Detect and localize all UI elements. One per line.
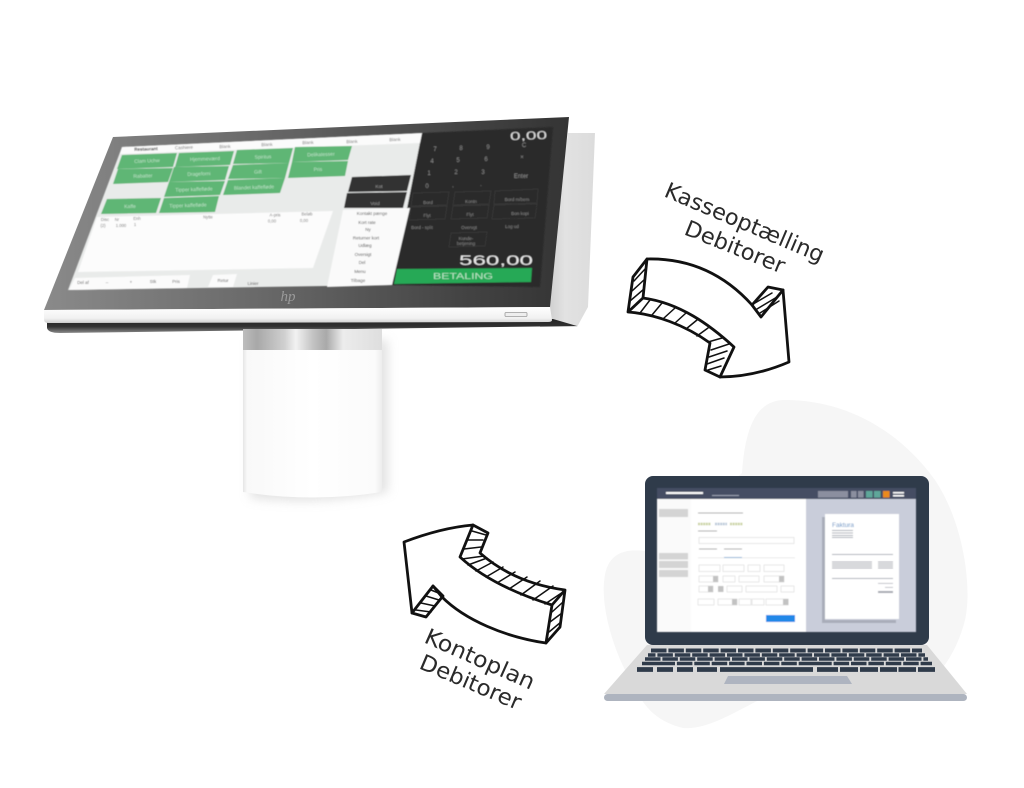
app header [657,488,916,499]
laptop lid [645,476,929,645]
invoice lines [832,530,893,593]
trackpad [724,676,852,684]
invoice title: Faktura [832,522,854,529]
laptop screen [657,488,916,632]
function keys: Bon kopi [511,211,529,216]
display bezel [44,117,569,310]
keypad: 5 [456,158,460,164]
total amount: 560,00 [459,252,533,268]
tile labels: Spiritus [255,154,272,161]
keypad: 4 [430,159,434,165]
tabs: Cashiere [175,145,194,150]
tile labels: Clam Uchw [134,158,160,165]
order table text: 0,00 [268,218,277,224]
keypad: 6 [484,157,488,163]
Debitorer: Debitorer [416,651,526,716]
side menu items: Oversigt [355,252,372,257]
arrow extrusion edges [628,259,783,377]
background blob behind laptop [604,400,967,728]
invoice page [825,514,899,619]
Kot and Void labels [370,184,383,207]
header items [666,491,904,498]
sidebar [657,499,691,632]
Kot and Void labels: Void [370,201,380,207]
toolbar text: Del af [77,280,90,285]
toolbar text: Retur [217,278,229,283]
Kot button [348,175,411,192]
order table text: (2) [100,223,106,228]
right dark panel [392,127,553,287]
side menu [327,208,410,287]
form inputs [698,565,794,605]
arrow: POS to laptop [628,259,789,377]
keypad: 3 [481,170,485,176]
invoice shadow [822,517,896,623]
keyboard deck [604,645,967,694]
keyboard [637,650,935,670]
function keys: Bord [423,200,433,205]
laptop base [604,694,967,701]
sidebar items [659,509,688,577]
tabs: Restaurant [134,146,158,152]
side menu items: Returner kort [353,236,380,240]
tabs: Blank [219,144,231,149]
toolbar text: + [130,280,133,284]
toolbar text: Linier [247,281,259,286]
tile labels: Gift [254,169,263,176]
side menu items: Tilbage [351,278,366,283]
back mounting plate [540,133,595,327]
order table [78,211,333,272]
tile labels: Tipper kaffefløde [169,202,207,210]
tile labels: Hjemmeværd [190,156,220,163]
tile labels: Drageforni [187,171,211,178]
order table text: Enh [133,216,141,221]
function keys: Log ud [505,224,519,229]
tile labels: Tipper kaffefløde [175,186,213,194]
tile labels: Kaffe [124,204,136,210]
keypad: Enter [514,174,528,180]
order table text: Beløb [302,212,313,216]
screen panels [657,488,806,632]
screen background [68,133,422,290]
Kot and Void labels: Kot [375,184,383,190]
form fields [698,512,795,558]
power indicator [505,312,527,316]
tabs: Blank [389,137,401,142]
keypad: . [480,182,482,188]
tile labels: Rabatter [133,173,153,180]
keypad [425,143,528,190]
display bottom strip [44,307,552,323]
side menu items: Ny [365,227,371,232]
function keys: Overvgt [461,225,478,230]
payment button [394,268,532,284]
order table text: 0,00 [300,218,309,223]
function keys: Bord - split [411,225,433,230]
keypad: 7 [433,147,437,153]
laptop [604,476,967,701]
function keys: Kunde- [459,236,474,241]
Void button [344,192,407,208]
tabs: Blank [346,139,358,144]
keypad: × [520,155,524,161]
side menu items [351,211,388,283]
arrow hatching [416,531,563,641]
payment label: BETALING [433,272,493,281]
side menu items: Kort rate [358,220,376,225]
preview panel [806,499,916,632]
keypad: 0 [425,184,429,190]
arrow hatching [630,268,779,370]
POS screen [68,127,553,290]
shadow bar under display [47,319,577,333]
function keys: Kontn [465,199,477,204]
order table text [100,212,313,228]
stand shadow [250,340,388,501]
label: Kasseoptælling Debitorer [661,179,828,280]
order table text: Nr [115,217,120,222]
tabs [134,137,401,152]
HP logo: hp [280,289,296,305]
order table text: 1.000 [116,223,127,228]
function keys [411,197,530,246]
side menu items: Menu [354,269,366,274]
stand collar [243,329,382,350]
POS terminal [44,117,595,501]
stand body [243,350,382,498]
order table text: A-pris [270,212,280,218]
amount display: 0,00 [510,130,547,143]
arrow: laptop to POS [404,525,565,643]
tile labels [124,152,335,210]
toolbar text [77,278,259,286]
side menu items: Del [359,260,365,265]
function key outlines [409,189,538,247]
form input toggles [708,576,788,605]
green product tiles [101,146,352,214]
bottom toolbar [69,274,237,290]
label: Kontoplan Debitorer [416,625,539,716]
keypad: 9 [486,145,490,151]
function keys: Flyt [466,212,474,217]
function keys: betjening [457,241,476,246]
order table text: 1 [134,222,137,227]
arrow extrusion edges [412,525,565,643]
toolbar text: Pris [172,279,181,284]
function keys: Bord m/bem [505,197,530,202]
tile labels: Pris [314,167,323,173]
tabs: Blank [302,140,314,145]
Debitorer: Debitorer [681,216,789,280]
Kontoplan: Kontoplan [421,625,539,695]
tabs: Blank [261,142,273,147]
Kasseoptælling: Kasseoptælling [661,179,828,268]
submit button [766,615,795,622]
keypad: 1 [427,171,431,177]
order table text: Nytte [203,214,214,220]
toolbar text: – [106,280,109,285]
top tab strip [120,133,422,154]
side menu items: Udlæg [358,243,372,248]
keypad: 2 [454,170,458,176]
arrow face [404,525,552,643]
function keys: Flyt [423,213,431,218]
arrow face [643,259,789,377]
keypad: 8 [459,146,463,152]
keypad: C [522,143,527,149]
order table text: Disc [101,217,109,222]
keypad: , [452,183,454,189]
toolbar text: Stk [150,279,157,284]
tile labels: Delikatesser [307,152,335,158]
side menu items: Kontakt pænge [357,211,388,216]
tile labels: Blandet kaffefløde [234,184,274,192]
